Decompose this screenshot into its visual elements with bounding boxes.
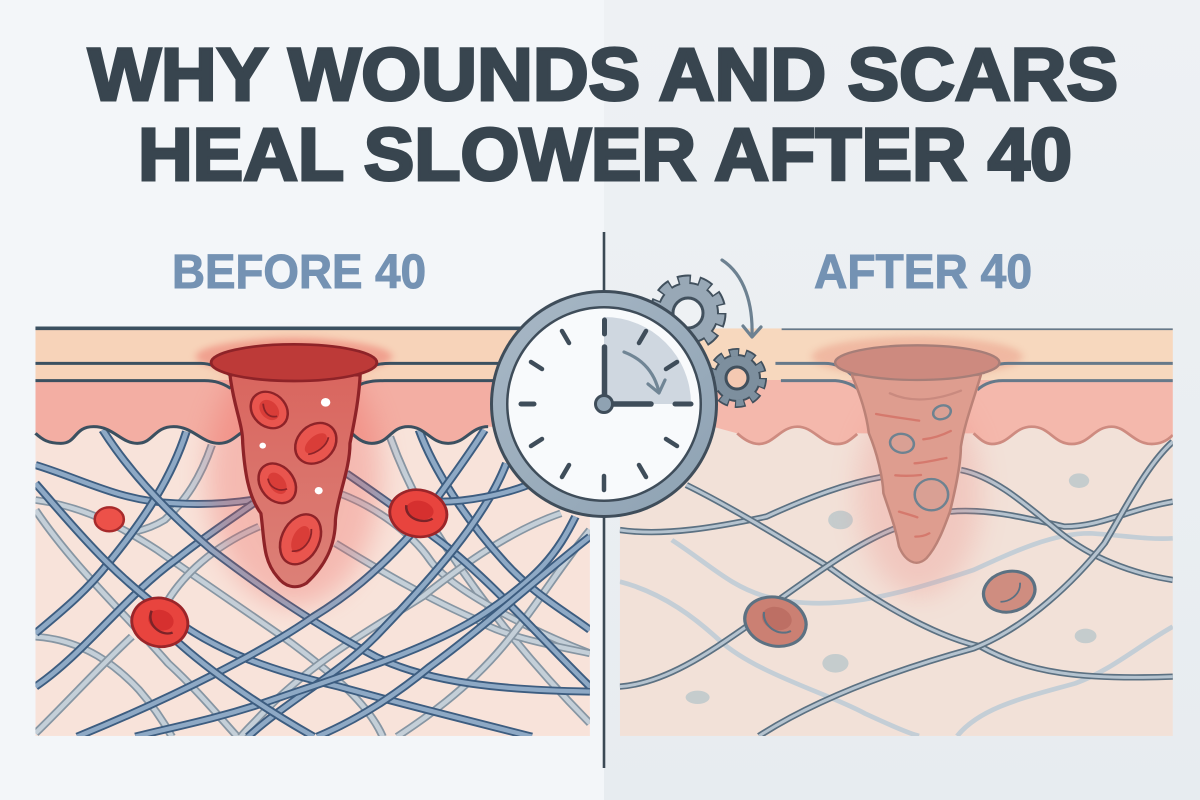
- clock: hands: [604, 347, 651, 404]
- faded cells in wound: [888, 403, 953, 510]
- arrow: gears to skin: [722, 260, 761, 337]
- cell remnants: [686, 473, 1096, 704]
- sparse fibers: faint: [620, 533, 1173, 736]
- clock: tick marks: [521, 320, 691, 490]
- heading: before 40: BEFORE 40: [172, 246, 426, 299]
- arrow: clock elapsed: [624, 352, 665, 393]
- skin lines and wave: [737, 328, 1173, 444]
- faded red cell: left: [737, 589, 814, 655]
- red cell: right of wound: [384, 484, 453, 543]
- faded red cell: right: [977, 565, 1041, 619]
- skin layers: [715, 380, 1173, 444]
- healing glow: [857, 390, 981, 597]
- skin layers: [36, 330, 517, 442]
- center divider line: [603, 232, 605, 768]
- wound: slow faded healing: [835, 345, 999, 563]
- background right: [604, 0, 1200, 800]
- skin lines: [35, 328, 539, 443]
- panel: before 40 skin cross-section: [35, 328, 590, 737]
- collagen fibers: dense before 40: [35, 437, 590, 737]
- scar streaks: [876, 391, 961, 537]
- clock: elapsed time wedge: [604, 317, 691, 404]
- panel: after 40 skin cross-section: [620, 328, 1173, 736]
- sparse fibers: collagen: [620, 442, 1173, 736]
- background left: [0, 0, 604, 800]
- red cells in wound: [243, 385, 354, 570]
- title: WHY WOUNDS AND SCARS: [88, 33, 1118, 116]
- title: HEAL SLOWER AFTER 40: [138, 113, 1072, 196]
- red cell: small: [95, 507, 124, 531]
- icon: large gear: [655, 280, 721, 346]
- wound glow: [207, 347, 381, 607]
- heading: after 40: AFTER 40: [814, 246, 1032, 299]
- wound: deep fresh blood: [211, 344, 377, 587]
- white cells in wound: [259, 398, 330, 494]
- icon: stopwatch clock: [490, 290, 718, 518]
- title: [88, 33, 1118, 196]
- clock: center pin: [596, 396, 612, 412]
- icon: small gear: [712, 352, 762, 404]
- red cell: lower left: [123, 590, 197, 655]
